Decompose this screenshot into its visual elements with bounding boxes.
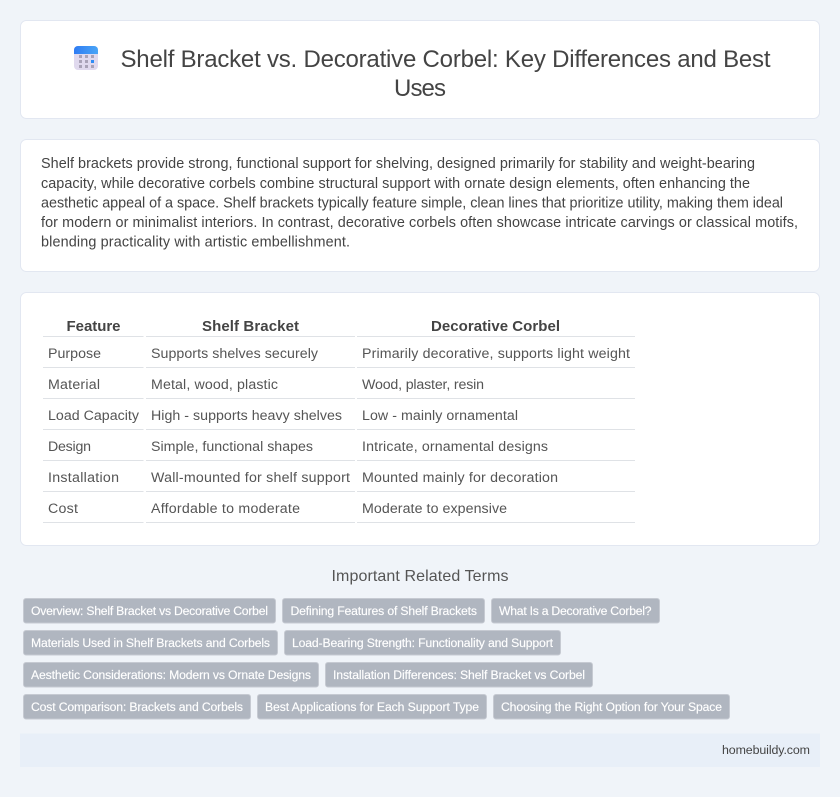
intro text: capacity, while decorative corbels combine structural support with ornate design elements, often enhancing the xyxy=(41,176,750,192)
tag xyxy=(326,662,592,687)
row: material: Metal, wood, plastic xyxy=(151,377,278,393)
intro text xyxy=(41,156,798,250)
row: installation xyxy=(48,470,558,486)
intro text: aesthetic appeal of a space. Shelf brackets typically feature simple, clean lines that prioritize utility, making them ideal xyxy=(41,196,783,212)
title: Uses xyxy=(394,75,446,102)
tag xyxy=(258,694,486,719)
tag xyxy=(24,630,278,655)
icon: calendar xyxy=(74,46,98,70)
tag xyxy=(24,694,250,719)
tag: Installation Differences: Shelf Bracket vs Corbel xyxy=(333,668,585,682)
comparison table panel xyxy=(20,292,820,546)
intro panel xyxy=(20,140,820,272)
row: load capacity: High - supports heavy shelves xyxy=(151,408,342,424)
related terms heading: Important Related Terms xyxy=(332,568,508,585)
tag: What Is a Decorative Corbel? xyxy=(499,604,652,618)
tag: Choosing the Right Option for Your Space xyxy=(501,700,722,714)
tag: Cost Comparison: Brackets and Corbels xyxy=(31,700,243,714)
tag xyxy=(494,694,730,719)
row: material: Wood, plaster, resin xyxy=(362,377,484,393)
row: installation: Wall-mounted for shelf support xyxy=(151,470,350,486)
tag: Materials Used in Shelf Brackets and Corbels xyxy=(31,636,270,650)
row: installation: Installation xyxy=(48,470,119,486)
row: load capacity: Load Capacity xyxy=(48,408,140,424)
footer xyxy=(20,734,820,767)
row: purpose xyxy=(48,346,630,362)
row: installation: Mounted mainly for decoration xyxy=(362,470,558,486)
row: purpose: Primarily decorative, supports light weight xyxy=(362,346,630,362)
table header xyxy=(66,318,560,335)
table header: Feature xyxy=(66,318,120,335)
row: material xyxy=(48,377,484,393)
tag: Best Applications for Each Support Type xyxy=(265,700,479,714)
row: purpose: Purpose xyxy=(48,346,101,362)
row: design: Design xyxy=(48,439,91,455)
footer site name: homebuildy.com xyxy=(722,743,810,757)
table header: Decorative Corbel xyxy=(431,318,560,335)
tag: Aesthetic Considerations: Modern vs Ornate Designs xyxy=(31,668,311,682)
row: cost: Cost xyxy=(48,501,78,517)
row: cost xyxy=(48,501,507,517)
row: design: Simple, functional shapes xyxy=(151,439,313,455)
tag xyxy=(282,598,484,623)
tag: Defining Features of Shelf Brackets xyxy=(290,604,477,618)
row: load capacity xyxy=(48,408,518,424)
intro text: blending practicality with artistic embellishment. xyxy=(41,234,350,250)
row: purpose: Supports shelves securely xyxy=(151,346,319,362)
tag xyxy=(284,630,560,655)
tag xyxy=(24,598,276,623)
tag xyxy=(492,598,660,623)
related term tags xyxy=(24,598,730,719)
row: design: Intricate, ornamental designs xyxy=(362,439,548,455)
tag: Load-Bearing Strength: Functionality and Support xyxy=(292,636,554,650)
tag xyxy=(24,662,318,687)
intro text: Shelf brackets provide strong, functional support for shelving, designed primarily for stability and weight-bearing xyxy=(41,156,755,172)
row: cost: Affordable to moderate xyxy=(151,501,300,517)
intro text: for modern or minimalist interiors. In contrast, decorative corbels often showcase intricate carvings or classical motifs, xyxy=(41,215,798,231)
row: load capacity: Low - mainly ornamental xyxy=(362,408,518,424)
header panel xyxy=(20,20,820,118)
tag: Overview: Shelf Bracket vs Decorative Corbel xyxy=(31,604,268,618)
row: material: Material xyxy=(48,377,100,393)
row: cost: Moderate to expensive xyxy=(362,501,507,517)
row: design xyxy=(48,439,548,455)
table header: Shelf Bracket xyxy=(202,318,299,335)
title: Shelf Bracket vs. Decorative Corbel: Key Differences and Best xyxy=(120,46,771,73)
